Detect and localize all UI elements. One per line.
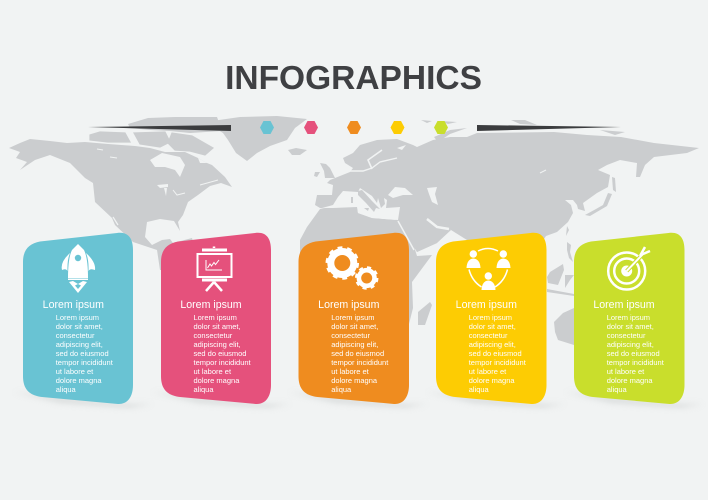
world map	[9, 116, 699, 380]
text block: adipiscing elit,	[607, 340, 654, 349]
heading: Lorem ipsum	[318, 299, 380, 311]
text block: Lorem ipsum	[469, 313, 512, 322]
text block: Lorem ipsum	[331, 313, 375, 322]
panel: card 5 target	[574, 233, 684, 404]
text block: dolore magna	[607, 376, 653, 385]
heading: Lorem ipsum	[456, 299, 517, 311]
central arctic islands	[134, 132, 170, 147]
text block: ut labore et	[331, 367, 370, 376]
sakhalin	[612, 177, 616, 192]
text block: dolore magna	[56, 376, 102, 385]
text block: dolor sit amet,	[607, 322, 654, 331]
icon: rocket	[62, 244, 95, 293]
text block: sed do eiusmod	[56, 349, 109, 358]
icon: gears	[327, 248, 377, 288]
text block: dolor sit amet,	[194, 322, 241, 331]
heading: Lorem ipsum	[43, 299, 104, 311]
africa	[300, 207, 432, 380]
text block: Lorem ipsum	[607, 313, 650, 322]
text block: consectetur	[607, 331, 646, 340]
text block: dolor sit amet,	[56, 322, 103, 331]
panel: card 4 people	[436, 233, 546, 404]
text block: ut labore et	[607, 367, 645, 376]
heading: Lorem ipsum	[180, 299, 242, 311]
japan	[585, 193, 612, 216]
text block: Lorem ipsum	[56, 313, 99, 322]
text block: consectetur	[469, 331, 508, 340]
text block: dolore magna	[331, 376, 378, 385]
text block: tempor incididunt	[56, 358, 114, 367]
text block: sed do eiusmod	[469, 349, 522, 358]
panel: card 1 rocket	[23, 233, 133, 404]
text block: ut labore et	[469, 367, 507, 376]
north america	[9, 139, 232, 270]
panel: card 3 gears	[298, 233, 409, 404]
south east asia islands	[547, 226, 574, 296]
panel: card 2 presentation	[161, 233, 271, 404]
text block: aliqua	[607, 385, 628, 394]
text block: adipiscing elit,	[469, 340, 516, 349]
text block: tempor incididunt	[469, 358, 527, 367]
text block: tempor incididunt	[607, 358, 665, 367]
ellesmere	[128, 117, 222, 133]
iceland	[288, 148, 307, 155]
inland seas and coast cuts	[97, 145, 546, 250]
icon: people cycle	[466, 248, 510, 290]
text block: aliqua	[331, 385, 352, 394]
text block: adipiscing elit,	[331, 340, 378, 349]
right pointer line	[477, 125, 621, 131]
arctic russia islands	[421, 120, 625, 142]
text block: Lorem ipsum	[194, 313, 237, 322]
banks and victoria islands	[90, 132, 130, 142]
text block: sed do eiusmod	[194, 349, 246, 358]
icon: presentation board	[198, 246, 232, 291]
card shadows	[14, 392, 703, 408]
text block: dolore magna	[194, 376, 240, 385]
text block: tempor incididunt	[331, 358, 389, 367]
mediterranean islands and italy	[351, 190, 380, 212]
eurasia	[315, 132, 699, 275]
title: INFOGRAPHICS	[225, 60, 482, 97]
text block: aliqua	[469, 385, 490, 394]
text block: ut labore et	[56, 367, 94, 376]
text block: sed do eiusmod	[331, 349, 384, 358]
left pointer line	[88, 125, 231, 131]
arabia	[398, 218, 451, 252]
britain and ireland	[314, 163, 335, 178]
text block: adipiscing elit,	[194, 340, 241, 349]
text block: dolor sit amet,	[331, 322, 378, 331]
text block: dolor sit amet,	[469, 322, 516, 331]
text block: dolore magna	[469, 376, 515, 385]
text block: adipiscing elit,	[56, 340, 103, 349]
text block: consectetur	[194, 331, 233, 340]
australia	[554, 308, 590, 350]
heading: Lorem ipsum	[593, 299, 655, 311]
text block: aliqua	[194, 385, 214, 394]
text block: consectetur	[331, 331, 370, 340]
text block: consectetur	[56, 331, 95, 340]
hexagon markers	[260, 121, 448, 134]
text block: sed do eiusmod	[607, 349, 660, 358]
madagascar	[418, 302, 432, 325]
greenland	[205, 116, 307, 161]
baffin island	[168, 133, 213, 155]
text block: ut labore et	[194, 367, 232, 376]
text block: tempor incididunt	[194, 358, 252, 367]
icon: target	[608, 247, 650, 290]
text block: aliqua	[56, 385, 77, 394]
